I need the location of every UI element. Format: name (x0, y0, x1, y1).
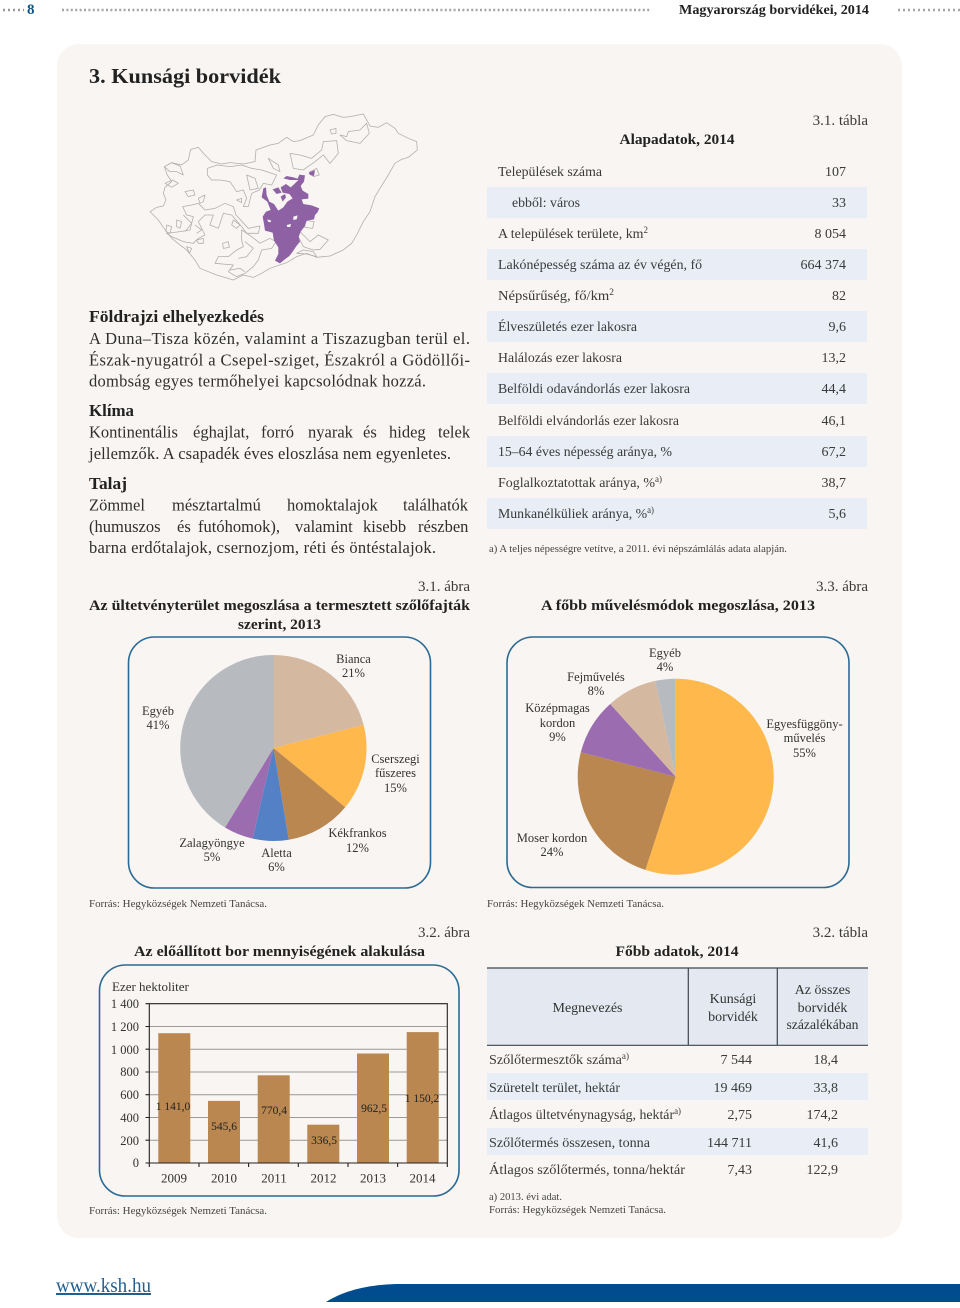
text block: soil: és (177, 517, 191, 536)
table 3.1: basic data: Munkanélküliek aránya, % (498, 507, 649, 522)
figure 3.2: wine production bar chart: 0 (133, 1156, 139, 1170)
figure 3.2: wine production bar chart: 2011 (261, 1170, 287, 1186)
figure 3.2: wine production bar chart: 200 (120, 1134, 139, 1148)
text block: soil (89, 474, 469, 557)
table 3.2: main data (487, 925, 868, 1216)
figure 3.1: grape varieties pie chart: Az ültetvényterület megoszlása a termesztett szőlőfajták (89, 598, 471, 614)
table 3.2: main data: borvidék (708, 1010, 758, 1025)
figure 3.1: grape varieties pie chart (89, 579, 471, 888)
figure 3.1: grape varieties pie chart: Cserszegi (371, 752, 420, 766)
table 3.1: basic data: Lakónépesség száma az év végén, fő (498, 258, 702, 273)
figure 3.3: cultivation methods pie chart: Középmagas (525, 701, 590, 715)
figure 3.3: cultivation methods pie chart: 4% (657, 660, 673, 674)
text block: soil: barna erdőtalajok, csernozjom, réti és öntéstalajok. (89, 538, 436, 557)
bars (158, 1032, 439, 1163)
text block: climate: Klíma (89, 401, 134, 420)
table 3.2: main data: százalékában (786, 1018, 858, 1033)
text block: geography: Észak-nyugatról a Csepel-sziget, Északról a Gödöllői- (89, 350, 470, 370)
table 3.2: main data: Átlagos ültetvénynagyság, hektár (489, 1108, 676, 1123)
text block: soil: valamint (295, 517, 353, 536)
figure 3.2: wine production bar chart (100, 925, 470, 1196)
source note, bar chart: Forrás: Hegyközségek Nemzeti Tanácsa. (89, 1205, 267, 1217)
table 3.1: basic data: Alapadatok, 2014 (620, 132, 735, 148)
figure 3.3: cultivation methods pie chart: 3.3. ábra (816, 579, 868, 595)
figure 3.2: wine production bar chart: 400 (120, 1111, 139, 1125)
figure 3.2: wine production bar chart: 2014 (410, 1170, 436, 1186)
purple highlighted region (262, 175, 319, 263)
figure 3.3: cultivation methods pie chart: Moser kordon (517, 831, 588, 845)
section title: 3. Kunsági borvidék (89, 64, 281, 88)
table 3.2: main data: 41,6 (814, 1136, 838, 1151)
table 3.2: main data: 144 711 (707, 1136, 752, 1151)
table 3.1: basic data: 82 (832, 289, 846, 304)
text block: climate: hideg (389, 422, 426, 442)
table 3.2: main data: 3.2. tábla (813, 925, 868, 941)
figure 3.1: grape varieties pie chart: 15% (384, 781, 407, 795)
text block: geography: dombság egyes termőhelyei kapcsolódnak hozzá. (89, 372, 426, 390)
figure 3.2: wine production bar chart: 3.2. ábra (418, 925, 470, 941)
figure 3.1: grape varieties pie chart: 12% (346, 841, 369, 855)
pie slice: Egyéb (180, 655, 274, 828)
figure 3.3: cultivation methods pie chart: 55% (793, 746, 816, 760)
pie slice: Moser kordon (578, 752, 676, 870)
table 3.2: main data: 174,2 (806, 1108, 838, 1123)
pie slice: Egyesfüggöny-művelés (645, 679, 774, 875)
table 3.1: basic data: 15–64 éves népesség aránya, % (498, 445, 672, 460)
figure 3.3: cultivation methods pie chart: 8% (588, 684, 604, 698)
text block: soil: Talaj (89, 474, 127, 493)
figure 3.2: wine production bar chart: 1 000 (111, 1043, 139, 1057)
figure 3.1: grape varieties pie chart: Bianca (336, 652, 371, 666)
figure 3.2: wine production bar chart: 2013 (360, 1170, 386, 1186)
table 3.2: main data: 18,4 (814, 1053, 838, 1068)
table 3.1: basic data: A települések területe, km (498, 227, 644, 242)
figure 3.2: wine production bar chart: 336,5 (311, 1135, 337, 1147)
table 3.2: main data: 7,43 (728, 1163, 752, 1178)
table 3.1: basic data: 13,2 (822, 351, 846, 366)
table 3.2: main data: Főbb adatok, 2014 (616, 944, 739, 960)
figure 3.1: grape varieties pie chart: fűszeres (375, 766, 416, 780)
figure 3.1: grape varieties pie chart: Zalagyöngye (179, 836, 245, 850)
figure 3.2: wine production bar chart: 1 141,0 (156, 1101, 190, 1113)
figure 3.2: wine production bar chart: 600 (120, 1088, 139, 1102)
figure 3.1: grape varieties pie chart: 6% (268, 860, 285, 874)
table 3.2: main data: Átlagos szőlőtermés, tonna/hektár (489, 1161, 685, 1178)
table 3.2: main data: Forrás: Hegyközségek Nemzeti Tanácsa. (489, 1204, 666, 1216)
figure 3.2: wine production bar chart: 2010 (211, 1170, 237, 1186)
table 3.1: basic data: 3.1. tábla (813, 113, 868, 129)
table 3.2: main data: a) (622, 1051, 629, 1061)
figure 3.2: wine production bar chart: Ezer hektoliter (112, 979, 190, 994)
table 3.2: main data: 7 544 (720, 1053, 752, 1068)
figure 3.3: cultivation methods pie chart: Fejművelés (567, 670, 625, 684)
pie slice: Zalagyöngye (225, 748, 274, 839)
table 3.1: basic data: ebből: város (512, 196, 580, 211)
text block: soil: kisebb (363, 517, 406, 536)
text block: climate: telek (438, 422, 471, 442)
figure 3.2: wine production bar chart: Az előállított bor mennyiségének alakulása (134, 944, 426, 960)
table 3.1: basic data: Foglalkoztatottak aránya, % (498, 476, 655, 491)
table 3.1: basic data: 33 (832, 196, 846, 211)
figure 3.2: wine production bar chart: 1 200 (111, 1020, 139, 1034)
table 3.1: basic data: 9,6 (828, 320, 846, 335)
source note, right: Forrás: Hegyközségek Nemzeti Tanácsa. (487, 898, 664, 910)
text block: soil: mésztartalmú (172, 496, 261, 514)
table 3.1: basic data (487, 113, 868, 555)
figure 3.3: cultivation methods pie chart: művelés (784, 731, 825, 745)
figure 3.1: grape varieties pie chart: Egyéb (142, 704, 174, 718)
table 3.1: basic data: a) (655, 474, 662, 484)
figure 3.2: wine production bar chart: 800 (120, 1065, 139, 1079)
table 3.1: basic data: a) A teljes népességre vetítve, a 2011. évi népszámlálás adata alapján. (489, 543, 787, 555)
pie slice: Fejművelés (610, 681, 676, 777)
pie slice: Egyéb (655, 679, 676, 777)
figure 3.2: wine production bar chart: 2012 (310, 1170, 336, 1186)
pie slice: Cserszegi fűszeres (274, 725, 367, 807)
figure 3.2: wine production bar chart: 962,5 (361, 1103, 387, 1115)
figure 3.3: cultivation methods pie chart: 9% (549, 730, 566, 744)
figure 3.1: grape varieties pie chart: 21% (342, 666, 365, 680)
table 3.1: basic data: Halálozás ezer lakosra (498, 351, 623, 366)
text block: soil: találhatók (403, 496, 469, 514)
table 3.2: main data: a) (674, 1106, 681, 1116)
figure 3.2: wine production bar chart: 1 150,2 (405, 1093, 440, 1105)
figure 3.3: cultivation methods pie chart: A főbb művelésmódok megoszlása, 2013 (541, 598, 815, 614)
table 3.2: main data: borvidék (798, 1001, 847, 1016)
text block: geography: Földrajzi elhelyezkedés (89, 307, 265, 326)
map of Hungary with the Kunság wine region (150, 114, 417, 280)
table 3.2: main data: 19 469 (714, 1081, 752, 1096)
text block: climate: éghajlat, (193, 422, 249, 442)
figure 3.3: cultivation methods pie chart: Egyéb (649, 646, 681, 660)
table 3.1: basic data: Belföldi elvándorlás ezer lakosra (498, 414, 680, 429)
table 3.1: basic data: 67,2 (822, 445, 846, 460)
table 3.1: basic data: Belföldi odavándorlás ezer lakosra (498, 382, 691, 397)
table 3.1: basic data: 2 (609, 287, 614, 297)
text block: climate: forró (261, 422, 294, 442)
table 3.1: basic data: 8 054 (814, 227, 846, 242)
text block: soil: Zömmel (89, 496, 145, 514)
table 3.1: basic data: Élveszületés ezer lakosra (498, 318, 638, 335)
pie slice: Kékfrankos (274, 748, 345, 840)
figure 3.2: wine production bar chart: 2009 (161, 1170, 187, 1186)
figure 3.1: grape varieties pie chart: 5% (204, 850, 220, 864)
text block: climate (88, 401, 471, 463)
figure 3.2: wine production bar chart: 770,4 (261, 1105, 287, 1117)
source note, left: Forrás: Hegyközségek Nemzeti Tanácsa. (89, 898, 267, 910)
footer link: www.ksh.hu (56, 1275, 151, 1297)
table 3.1: basic data: 46,1 (822, 414, 846, 429)
text block: climate: nyarak (308, 422, 354, 442)
text block: climate: Kontinentális (89, 422, 178, 442)
table 3.2: main data: Szüretelt terület, hektár (489, 1081, 620, 1096)
table 3.1: basic data: Települések száma (498, 165, 603, 180)
table 3.1: basic data: 664 374 (800, 258, 846, 273)
table 3.2: main data: 33,8 (814, 1081, 838, 1096)
figure 3.3: cultivation methods pie chart: kordon (540, 716, 576, 730)
table 3.1: basic data: 38,7 (822, 476, 846, 491)
figure 3.1: grape varieties pie chart: szerint, 2013 (238, 617, 321, 633)
figure 3.2: wine production bar chart: 1 400 (111, 997, 139, 1011)
text block: soil: (humuszos (89, 517, 160, 536)
figure 3.3: cultivation methods pie chart: Egyesfüggöny- (766, 717, 843, 731)
text block: soil: homoktalajok (287, 496, 378, 514)
figure 3.3: cultivation methods pie chart (507, 579, 868, 888)
pie slice: Aletta (253, 748, 289, 841)
table 3.2: main data: Az összes (795, 983, 850, 998)
table 3.1: basic data: 44,4 (822, 382, 846, 397)
table 3.1: basic data: a) (647, 505, 654, 515)
figure 3.1: grape varieties pie chart: 3.1. ábra (418, 579, 470, 595)
footer blue band (326, 1284, 960, 1302)
table 3.2: main data: Szőlőtermesztők száma (489, 1053, 621, 1068)
figure 3.1: grape varieties pie chart: Kékfrankos (328, 826, 387, 840)
table 3.2: main data: Megnevezés (553, 1001, 622, 1016)
pie slice: Középmagas kordon (581, 704, 676, 777)
figure 3.1: grape varieties pie chart: 41% (147, 718, 169, 732)
table 3.2: main data: 2,75 (728, 1108, 752, 1123)
text block: geography (89, 307, 470, 390)
table 3.2: main data: 122,9 (806, 1163, 838, 1178)
page number: 8 (27, 2, 34, 18)
page header (3, 2, 960, 18)
table 3.1: basic data: 5,6 (828, 507, 846, 522)
text block: geography: A Duna–Tisza közén, valamint a Tiszazugban terül el. (89, 329, 470, 348)
figure 3.3: cultivation methods pie chart: 24% (541, 845, 563, 859)
running title: Magyarország borvidékei, 2014 (679, 3, 869, 18)
table 3.1: basic data: Népsűrűség, fő/km (498, 289, 605, 304)
table 3.2: main data: Kunsági (710, 992, 756, 1007)
text block: climate: jellemzők. A csapadék éves eloszlása nem egyenletes. (88, 444, 451, 463)
figure 3.1: grape varieties pie chart: Aletta (261, 846, 292, 860)
table 3.1: basic data: 107 (825, 165, 846, 180)
table 3.1: basic data: 2 (644, 225, 648, 235)
text block: climate: és (363, 422, 377, 442)
pie slice: Bianca (274, 655, 364, 748)
text block: soil: részben (418, 517, 468, 536)
figure 3.2: wine production bar chart: 545,6 (211, 1121, 237, 1133)
table 3.2: main data: Szőlőtermés összesen, tonna (489, 1136, 651, 1151)
text block: soil: futóhomok), (198, 517, 280, 536)
table 3.2: main data: a) 2013. évi adat. (489, 1191, 562, 1203)
